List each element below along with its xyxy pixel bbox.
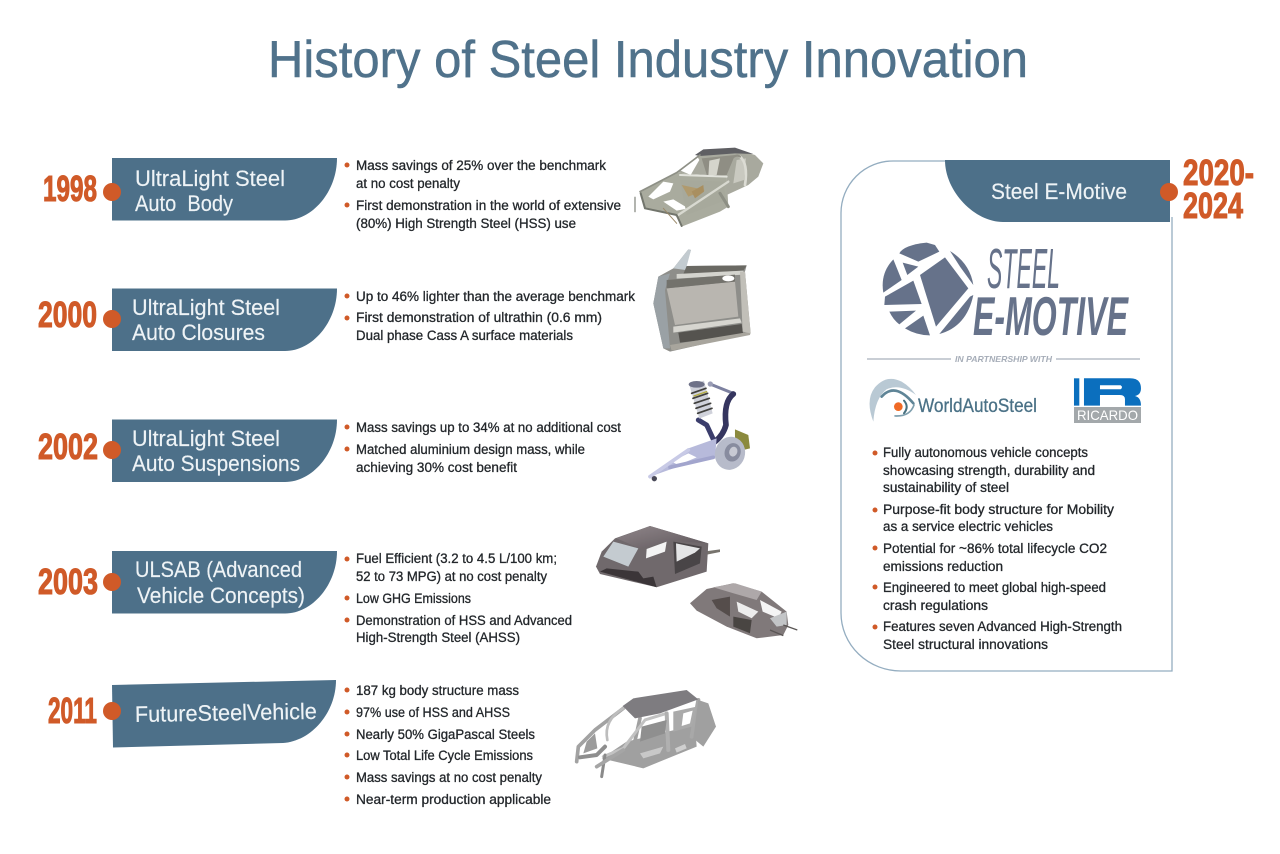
- bullet list: 2000: Up to 46% lighter than the average benchmark: [356, 289, 635, 304]
- bullet list: Steel E-Motive: crash regulations: [883, 598, 988, 613]
- image: suspension assembly: [650, 381, 750, 481]
- bullet list: Steel E-Motive: [872, 445, 1122, 652]
- title: History of Steel Industry Innovation: [268, 31, 1028, 89]
- timeline entry: 2000 UltraLight Steel Auto Closures: [38, 249, 751, 352]
- partnership divider: IN PARTNERSHIP WITH: [955, 354, 1053, 364]
- banner: Steel E-Motive: [945, 160, 1170, 222]
- wordmark: E-MOTIVE: [973, 285, 1129, 347]
- year marker: 2020-2024: 2024: [1183, 185, 1243, 226]
- panel: Steel E-Motive: [841, 152, 1254, 671]
- bullet list: Steel E-Motive: sustainability of steel: [883, 480, 1009, 495]
- timeline entry: 2011 FutureSteelVehicle: [48, 680, 716, 807]
- panel outline: [841, 161, 1172, 671]
- bullet list: 2000: Dual phase Cass A surface materials: [356, 328, 573, 343]
- image: two advanced vehicle body shells: [596, 526, 797, 638]
- banner: FutureSteelVehicle: FutureSteelVehicle: [135, 699, 317, 727]
- bullet list: 2003: Low GHG Emissions: [356, 591, 471, 606]
- banner: UltraLight Steel Auto Body: Auto Body: [135, 191, 234, 216]
- banner: ULSAB (Advanced Vehicle Concepts): [112, 551, 337, 614]
- bullet list: 2011: [344, 683, 551, 807]
- image: door closure panel: [653, 249, 751, 352]
- year marker: 2003: 2003: [38, 561, 98, 602]
- bullet list: 2002: Matched aluminium design mass, while: [356, 442, 585, 457]
- year marker: 1998: 1998: [43, 168, 97, 209]
- year marker: 2000: 2000: [38, 294, 97, 335]
- bullet list: Steel E-Motive: Features seven Advanced High-Strength: [883, 619, 1122, 634]
- banner: UltraLight Steel Auto Suspensions: Auto Suspensions: [132, 451, 300, 476]
- bullet list: 2003: Demonstration of HSS and Advanced: [356, 613, 572, 628]
- bullet list: 2003: [344, 551, 572, 645]
- year marker: 2020-2024: [1160, 152, 1254, 226]
- logo: Ricardo: [1074, 378, 1141, 423]
- year marker: 2002: 2002: [38, 426, 98, 467]
- banner: UltraLight Steel Auto Closures: [112, 288, 337, 351]
- bullet list: 1998: at no cost penalty: [356, 176, 460, 191]
- logo: Steel E-Motive: [883, 237, 1129, 347]
- timeline entry: 1998 UltraLight Steel Auto Body: [43, 148, 763, 231]
- year marker: 2011: 2011: [48, 690, 97, 731]
- bullet list: 2011: 187 kg body structure mass: [356, 683, 519, 698]
- bullet list: 2000: First demonstration of ultrathin (0.6 mm): [356, 310, 602, 325]
- timeline entry: 2003 ULSAB Advanced Vehicle Concepts: [38, 526, 797, 645]
- bullet list: Steel E-Motive: emissions reduction: [883, 559, 1003, 574]
- banner: FutureSteelVehicle: [112, 680, 336, 748]
- image: FutureSteelVehicle body shell: [577, 690, 716, 777]
- bullet list: Steel E-Motive: Fully autonomous vehicle concepts: [883, 445, 1088, 460]
- bullet list: 2002: [344, 420, 621, 475]
- bullet list: 2011: Low Total Life Cycle Emissions: [356, 748, 533, 763]
- bullet list: Steel E-Motive: as a service electric vehicles: [883, 519, 1053, 534]
- logo: WorldAutoSteel: WorldAutoSteel: [918, 396, 1037, 417]
- banner: UltraLight Steel Auto Closures: UltraLight Steel: [132, 295, 280, 320]
- logo: Ricardo: RICARDO: [1077, 407, 1138, 423]
- timeline entry: 2002 UltraLight Steel Auto Suspensions: [38, 381, 750, 482]
- bullet list: 1998: Mass savings of 25% over the benchmark: [356, 158, 606, 173]
- wordmark: [973, 237, 1129, 347]
- wordmark: STEEL: [987, 237, 1060, 301]
- bullet list: 2002: achieving 30% cost benefit: [356, 460, 517, 475]
- banner: ULSAB (Advanced Vehicle Concepts): Vehicle Concepts): [137, 583, 305, 608]
- banner: UltraLight Steel Auto Suspensions: UltraLight Steel: [132, 426, 280, 451]
- bullet list: 2011: Mass savings at no cost penalty: [356, 770, 542, 785]
- bullet list: 1998: First demonstration in the world of extensive: [356, 198, 621, 213]
- bullet list: Steel E-Motive: Purpose-fit body structure for Mobility: [883, 502, 1114, 517]
- bullet list: 2000: [344, 289, 635, 343]
- icon: faceted globe: [883, 243, 973, 335]
- bullet list: 2011: 97% use of HSS and AHSS: [356, 705, 510, 720]
- bullet list: 2002: Mass savings up to 34% at no additional cost: [356, 420, 621, 435]
- bullet list: 2003: 52 to 73 MPG) at no cost penalty: [356, 569, 547, 584]
- banner: UltraLight Steel Auto Body: [112, 158, 337, 220]
- banner: ULSAB (Advanced Vehicle Concepts): ULSAB (Advanced: [135, 557, 302, 582]
- bullet list: Steel E-Motive: Potential for ~86% total lifecycle CO2: [883, 541, 1107, 556]
- bullet list: 2011: Near-term production applicable: [356, 792, 551, 807]
- year marker: 2020-2024: 2020-: [1183, 152, 1254, 193]
- bullet list: 2003: High-Strength Steel (AHSS): [356, 630, 520, 645]
- bullet list: Steel E-Motive: Steel structural innovations: [883, 637, 1048, 652]
- bullet list: Steel E-Motive: showcasing strength, durability and: [883, 463, 1095, 478]
- bullet list: Steel E-Motive: Engineered to meet global high-speed: [883, 580, 1106, 595]
- bullet list: 2003: Fuel Efficient (3.2 to 4.5 L/100 km;: [356, 551, 557, 566]
- bullet list: 1998: [344, 158, 621, 231]
- banner: UltraLight Steel Auto Suspensions: [112, 420, 337, 482]
- banner: UltraLight Steel Auto Body: UltraLight Steel: [135, 166, 285, 191]
- banner: UltraLight Steel Auto Closures: Auto Closures: [132, 320, 265, 345]
- banner: Steel E-Motive: Steel E-Motive: [991, 179, 1127, 204]
- image: ultralight steel auto body shell: [635, 148, 763, 227]
- logo: WorldAutoSteel: [870, 379, 1037, 422]
- bullet list: 1998: (80%) High Strength Steel (HSS) use: [356, 216, 576, 231]
- bullet list: 2011: Nearly 50% GigaPascal Steels: [356, 727, 535, 742]
